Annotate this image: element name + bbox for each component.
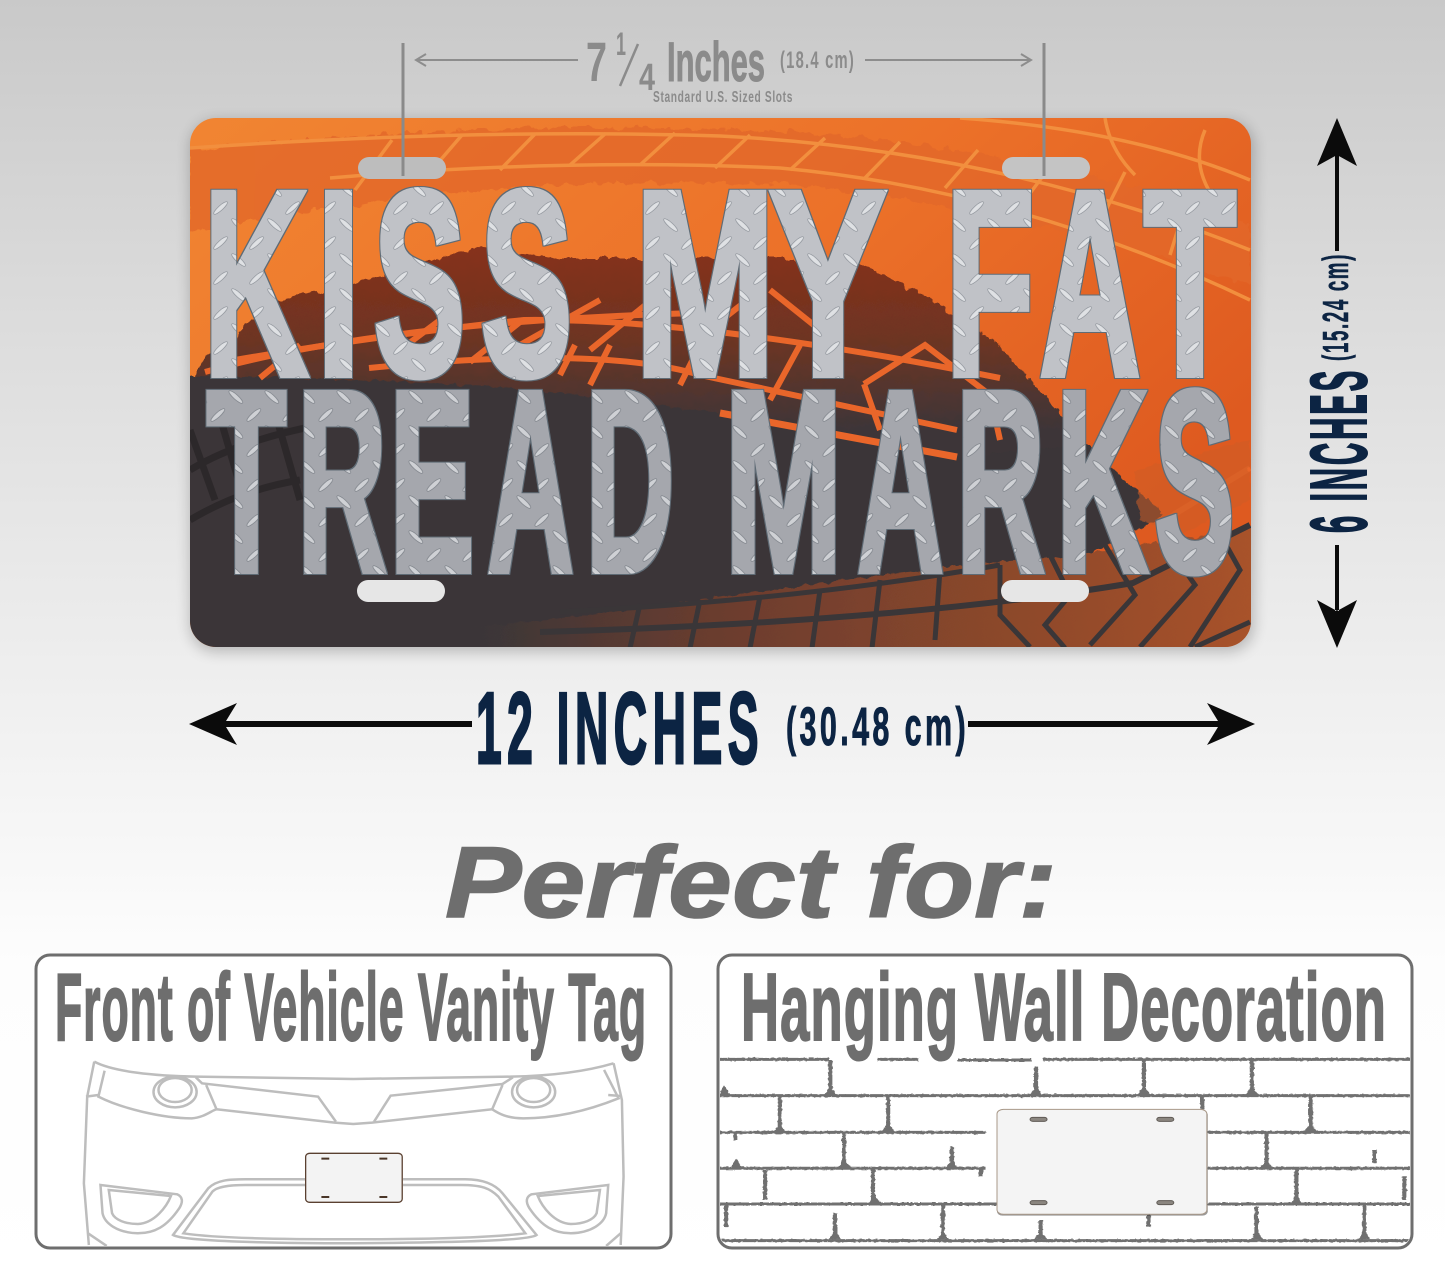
dark tread lines on bottom band: [540, 525, 1250, 648]
faint tread at upper right: [1135, 440, 1250, 535]
plate text line 1: [204, 137, 1236, 430]
mounting slot: bottom right: [1001, 580, 1089, 602]
slot spacing arrows: [416, 54, 1031, 66]
orange tread lines: [204, 286, 1251, 472]
width label: 12 INCHES: [476, 673, 764, 785]
middle brown tread shape: [195, 246, 1164, 516]
height dimension: [1294, 118, 1383, 648]
plate text line 2: A: [488, 339, 573, 625]
plate text line 2: R: [298, 339, 386, 625]
panel: wall decoration: [718, 954, 1412, 1248]
height label: 6 INCHES: [1294, 368, 1383, 533]
plate text line 2: M: [725, 339, 842, 625]
slot spacing label: Inches: [667, 30, 765, 93]
height label: [1294, 253, 1383, 533]
panel: front of vehicle: [36, 954, 671, 1248]
plate text line 2: K: [1057, 339, 1147, 625]
plate text line 1: A: [1040, 137, 1140, 430]
text: Front of Vehicle Vanity Tag: [55, 954, 647, 1061]
mounting slot: top left: [358, 157, 446, 179]
plate text line 1: Y: [770, 137, 886, 430]
dark tread lines on dark area: [190, 425, 303, 523]
plate text line 2: [207, 339, 1234, 625]
slot spacing dimension: [403, 26, 1044, 176]
heading: Perfect for: Perfect for:: [445, 827, 1057, 939]
slot spacing label: 7: [586, 30, 607, 93]
mounting slot: top right: [1002, 157, 1090, 179]
slot spacing label: 4: [639, 57, 655, 99]
plate text line 1: T: [1144, 137, 1236, 430]
plate text line 2: A: [858, 339, 943, 625]
slot spacing label: 1: [616, 26, 626, 62]
width dimension: [189, 673, 1255, 785]
mounting slot: bottom left: [357, 580, 445, 602]
miniature plate on wall: [997, 1109, 1208, 1216]
miniature plate on car: [306, 1153, 402, 1202]
plate text line 2: T: [207, 339, 286, 625]
slot spacing label: [586, 26, 855, 106]
brick wall: [719, 1059, 1410, 1241]
plate text line 2: D: [586, 339, 674, 625]
width label: (30.48 cm): [786, 697, 969, 757]
car front outline: [84, 1062, 624, 1246]
plate text line 1: F: [946, 137, 1034, 430]
plate text line 1: S: [374, 137, 465, 430]
plate text line 1: I: [317, 137, 360, 430]
bottom brown tread band: [516, 528, 1251, 647]
width arrow: [189, 703, 1255, 745]
license plate: S: [1155, 339, 1234, 625]
slot spacing label: Standard U.S. Sized Slots: [653, 89, 793, 106]
plate text line 1: S: [481, 137, 572, 430]
license plate: [180, 118, 1260, 655]
plate text line 1: K: [204, 137, 307, 430]
height label: (15.24 cm): [1315, 253, 1356, 361]
slot spacing label: (18.4 cm): [780, 47, 855, 74]
height arrow: [1317, 118, 1357, 648]
plate text line 2: R: [957, 339, 1044, 625]
upper tread marks: [190, 118, 1250, 300]
dark lower plate area: [180, 376, 1164, 655]
plate text line 1: M: [635, 137, 775, 430]
plate text line 2: E: [390, 339, 474, 625]
